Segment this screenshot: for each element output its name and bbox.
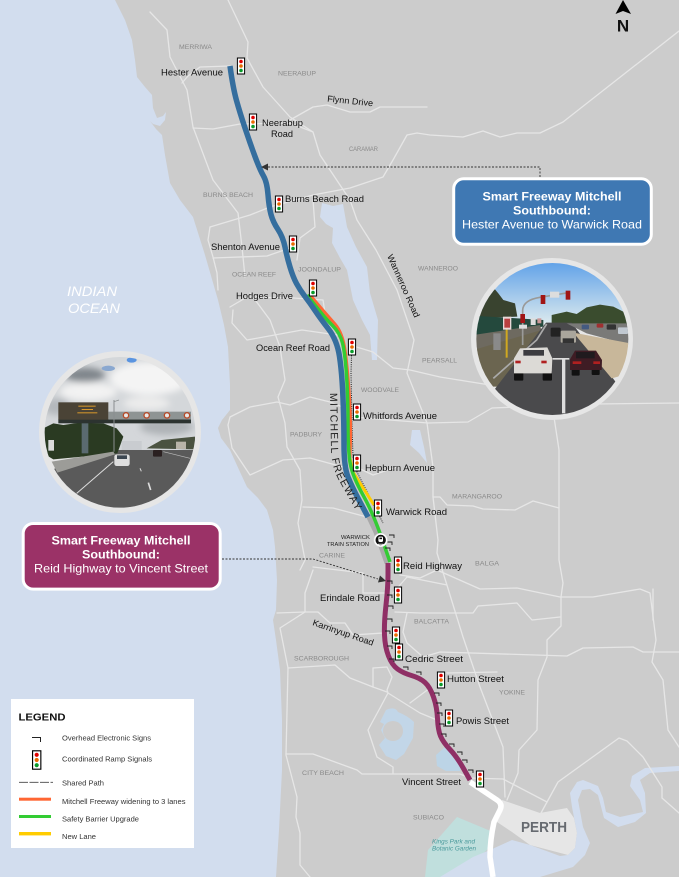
suburb labels: PEARSALL <box>422 358 457 364</box>
panel: legend <box>11 699 194 848</box>
road name labels <box>161 68 510 787</box>
icon: ramp signal Powis Street <box>445 710 453 726</box>
legend item: shared path: Shared Path <box>62 781 104 788</box>
road network <box>150 0 679 877</box>
icon: ramp signal Reid Highway <box>394 557 402 573</box>
legend item: coordinated ramp signals <box>33 751 153 769</box>
Perth city area <box>497 800 577 855</box>
Herdsman lake <box>436 747 462 771</box>
road name labels: Hodges Drive <box>236 291 293 301</box>
label: Warwick Train Station: TRAIN STATION <box>327 542 369 548</box>
icon: ramp signal Ocean Reef Road <box>348 339 356 355</box>
north arrow: N <box>617 17 629 36</box>
suburb labels: NEERABUP <box>278 70 316 78</box>
road name labels: Burns Beach Road <box>285 194 364 204</box>
callout: Hester Avenue to Warwick Road <box>454 179 651 244</box>
suburb labels: CITY BEACH <box>302 770 344 777</box>
label: Warwick Train Station: WARWICK <box>341 535 370 541</box>
legend item: safety barrier upgrade: Safety Barrier Upgrade <box>62 817 139 824</box>
suburb labels: WOODVALE <box>361 387 399 394</box>
road name labels: Shenton Avenue <box>211 242 280 252</box>
callout: Hester Avenue to Warwick Road: Smart Freeway Mitchell <box>482 190 622 204</box>
road name labels: Powis Street <box>456 716 510 726</box>
road name labels: Hepburn Avenue <box>365 463 435 473</box>
route: orange widening to 3 lanes <box>310 295 351 458</box>
road name labels: Vincent Street <box>402 777 462 787</box>
legend heading: LEGEND <box>18 712 66 724</box>
legend item: widening to 3 lanes: Mitchell Freeway widening to 3 lanes <box>62 799 186 806</box>
suburb labels: MARANGAROO <box>452 494 502 500</box>
overhead electronic signs <box>385 535 473 773</box>
callout: Hester Avenue to Warwick Road: Southbound: <box>513 204 591 218</box>
road name labels: Whitfords Avenue <box>363 411 437 421</box>
icon: ramp signal Hester Avenue <box>237 58 245 74</box>
callout: Reid Highway to Vincent Street: Southbound: <box>82 548 160 562</box>
legend item: widening to 3 lanes <box>19 798 186 806</box>
callout: Hester Avenue to Warwick Road: Hester Avenue to Warwick Road <box>462 218 642 232</box>
road name labels: Karrinyup Road <box>311 617 375 648</box>
road name labels: Cedric Street <box>405 654 464 664</box>
arrow: leader from purple callout to route <box>222 559 386 582</box>
label: Indian Ocean <box>67 283 121 316</box>
north arrow <box>616 0 631 36</box>
suburb labels: BALGA <box>475 560 500 568</box>
legend item: shared path <box>19 781 104 788</box>
callout: Reid Highway to Vincent Street <box>23 524 220 589</box>
label: Indian Ocean: INDIAN <box>67 283 118 299</box>
label: Kings Park and Botanic Garden: Botanic Garden <box>432 846 477 852</box>
suburb labels: SCARBOROUGH <box>294 656 349 662</box>
suburb labels <box>179 44 525 822</box>
icon: ramp signal Karrinyup Road <box>392 627 400 643</box>
label: Indian Ocean: OCEAN <box>68 300 121 316</box>
Swan River <box>440 766 679 877</box>
label: Mitchell Freeway: MITCHELL FREEWAY <box>330 394 362 508</box>
lakes and wetlands <box>320 203 427 760</box>
suburb labels: CARINE <box>319 552 345 560</box>
suburb labels: SUBIACO <box>413 814 444 822</box>
route: green safety barrier upgrade <box>307 295 390 562</box>
route: yellow new lane <box>350 458 374 505</box>
suburb labels: PADBURY <box>290 432 323 438</box>
road name labels: Wanneroo Road <box>385 253 422 319</box>
legend item: new lane <box>19 832 96 841</box>
road name labels: Neerabup <box>262 118 303 128</box>
Perth approach freeway (white) <box>470 782 501 877</box>
arrow: leader from blue callout to route <box>261 164 540 177</box>
road name labels: Road <box>271 129 293 139</box>
suburb labels: MERRIWA <box>179 44 213 51</box>
road name labels: Warwick Road <box>386 507 447 517</box>
legend item: overhead electronic signs <box>32 736 152 743</box>
label: Warwick Train Station <box>327 535 370 548</box>
icon: ramp signal Hutton Street <box>437 672 445 688</box>
label: Perth: PERTH <box>521 820 567 836</box>
road name labels: Hutton Street <box>447 674 505 684</box>
icon: ramp signal Hepburn Avenue <box>353 455 361 471</box>
icon: ramp signal Burns Beach Road <box>275 196 283 212</box>
icon: ramp signal Cedric Street <box>395 644 403 660</box>
road name labels: Flynn Drive <box>327 94 374 108</box>
suburb labels: CARAMAR <box>349 146 378 153</box>
shared path dotted line <box>351 340 383 523</box>
lake fill island <box>383 721 403 741</box>
icon: ramp signal Erindale Road <box>394 587 402 603</box>
legend item: safety barrier upgrade <box>19 815 139 824</box>
callout: Reid Highway to Vincent Street: Smart Freeway Mitchell <box>52 534 190 548</box>
icon: ramp signal Warwick Road <box>374 500 382 516</box>
icon: ramp signal Whitfords Avenue <box>353 404 361 420</box>
label: Kings Park and Botanic Garden <box>432 838 477 852</box>
suburb labels: YOKINE <box>499 690 525 696</box>
icon: ramp signal Hodges Drive <box>309 280 317 296</box>
icon: ramp signal Shenton Avenue <box>289 236 297 252</box>
suburb labels: OCEAN REEF <box>232 272 276 278</box>
suburb labels: WANNEROO <box>418 266 458 272</box>
photo: ramp signals on freeway <box>471 258 633 420</box>
icon: ramp signal Neerabup Road <box>249 114 257 130</box>
route: blue Hester Avenue to Warwick Road <box>230 66 368 517</box>
road name labels: Reid Highway <box>403 561 463 571</box>
callout: Reid Highway to Vincent Street: Reid Highway to Vincent Street <box>34 562 209 576</box>
icon: ramp signal Vincent Street <box>476 771 484 787</box>
icon: Warwick train station <box>374 533 388 547</box>
photo: overhead gantry on freeway <box>39 351 201 513</box>
Kings Park and Botanic Garden area <box>425 817 493 877</box>
suburb labels: BALCATTA <box>414 618 450 626</box>
suburb labels: JOONDALUP <box>298 266 341 274</box>
legend item: overhead electronic signs: Overhead Electronic Signs <box>62 736 152 743</box>
legend item: coordinated ramp signals: Coordinated Ramp Signals <box>62 757 153 764</box>
label: Kings Park and Botanic Garden: Kings Park and <box>432 838 476 846</box>
route: purple Reid Highway to Vincent Street <box>384 563 470 780</box>
suburb labels: BURNS BEACH <box>203 192 253 199</box>
road name labels: Ocean Reef Road <box>256 343 330 353</box>
route: grey existing section <box>368 515 387 563</box>
road name labels: Erindale Road <box>320 593 380 603</box>
legend item: new lane: New Lane <box>62 834 96 841</box>
road name labels: Hester Avenue <box>161 68 223 78</box>
